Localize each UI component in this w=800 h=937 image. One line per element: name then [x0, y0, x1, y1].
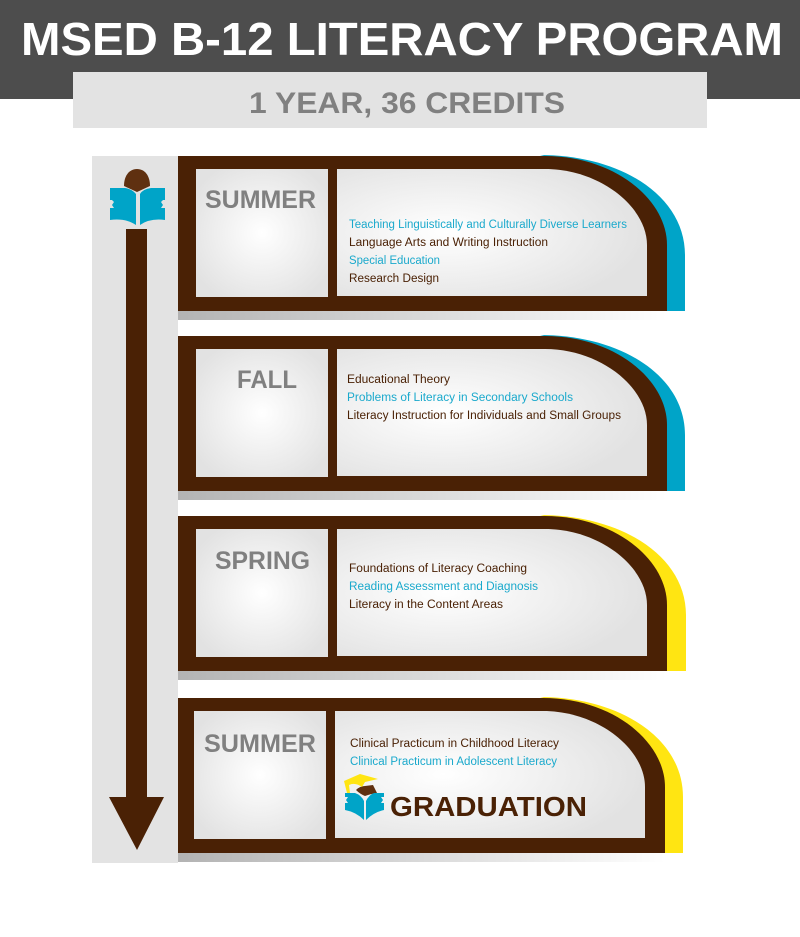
subtitle band — [73, 72, 707, 128]
panel: spring — [178, 515, 686, 680]
course list — [349, 563, 538, 611]
icon: graduate with book — [344, 774, 384, 820]
course list — [347, 374, 621, 422]
panel: summer 1 — [178, 155, 685, 320]
subtitle band: 1 YEAR, 36 CREDITS — [249, 87, 565, 120]
heading: summer: SUMMER — [204, 730, 316, 758]
panel: summer 2 — [178, 697, 683, 862]
course list: Teaching Linguistically and Culturally Diverse Learners — [349, 219, 627, 231]
panel: fall — [178, 335, 685, 500]
graduation label: GRADUATION — [390, 791, 587, 822]
heading: fall: FALL — [237, 366, 297, 394]
heading: summer: SUMMER — [205, 186, 316, 214]
course list — [350, 738, 559, 768]
course list: Foundations of Literacy Coaching — [349, 563, 527, 575]
timeline arrow — [109, 229, 164, 850]
course list — [349, 219, 627, 285]
course list: Educational Theory — [347, 374, 450, 386]
timeline bar — [92, 156, 178, 863]
course list: Language Arts and Writing Instruction — [349, 237, 548, 249]
course list: Literacy in the Content Areas — [349, 599, 503, 611]
course list: Special Education — [349, 255, 440, 267]
icon: reader with book — [110, 169, 165, 225]
course list: Problems of Literacy in Secondary Schools — [347, 392, 573, 404]
course list: Research Design — [349, 273, 439, 285]
heading: spring: SPRING — [215, 547, 310, 575]
course list: Clinical Practicum in Childhood Literacy — [350, 738, 559, 750]
course list: Reading Assessment and Diagnosis — [349, 581, 538, 593]
header band — [0, 0, 800, 99]
course list: Literacy Instruction for Individuals and Small Groups — [347, 410, 621, 422]
course list: Clinical Practicum in Adolescent Literacy — [350, 756, 557, 768]
title: MSED B-12 LITERACY PROGRAM — [21, 13, 783, 65]
